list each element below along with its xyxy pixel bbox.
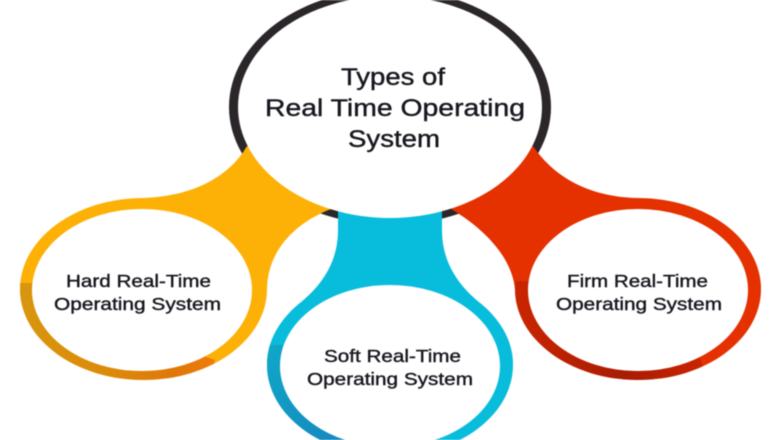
panel: firm real-time connector and ring (451, 146, 761, 380)
label: soft real-time: Soft Real-Time (324, 346, 461, 366)
panel: soft real-time connector and ring (267, 205, 513, 440)
label: firm real-time: Firm Real-Time (567, 271, 708, 291)
title (265, 64, 525, 153)
title: System (348, 126, 440, 153)
hard ring interior (32, 209, 252, 371)
label: soft real-time (307, 346, 473, 389)
label: firm real-time (556, 271, 722, 314)
title: Types of (341, 64, 445, 91)
firm ring interior (528, 209, 748, 371)
label: soft real-time: Operating System (307, 369, 473, 389)
title: Real Time Operating (265, 95, 525, 122)
label: hard real-time: Hard Real-Time (66, 271, 211, 291)
central dark ring (229, 0, 551, 225)
label: firm real-time: Operating System (556, 294, 722, 314)
central white circle (238, 0, 542, 218)
panel: hard real-time connector and ring (20, 146, 331, 380)
soft ring interior (280, 285, 500, 440)
label: hard real-time: Operating System (54, 294, 221, 314)
label: hard real-time (54, 271, 221, 314)
